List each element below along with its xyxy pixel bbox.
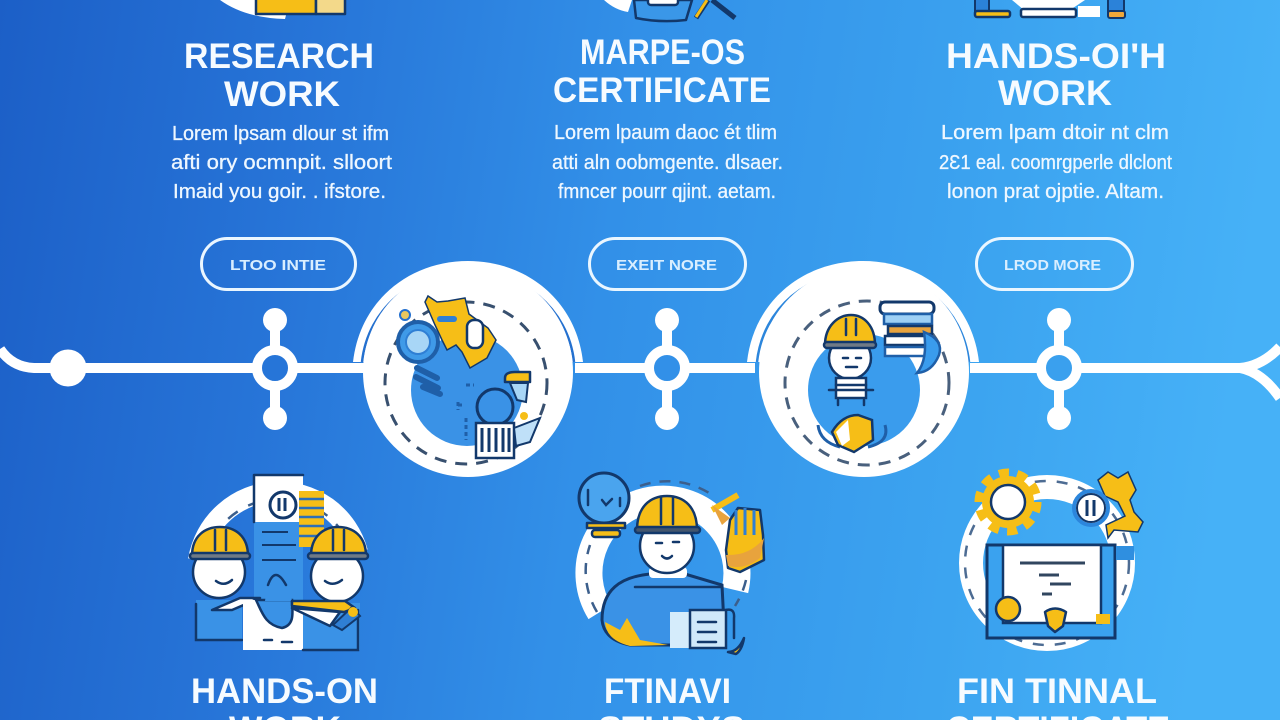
icon: final certificate xyxy=(965,472,1143,645)
heading: research work xyxy=(184,37,374,114)
text block: hands-on description: 2Ɛ1 eal. coomrgperle dlclont xyxy=(939,152,1172,174)
button: certificate xyxy=(590,238,746,290)
coin stack xyxy=(299,491,324,547)
panel: research work xyxy=(171,37,392,290)
icon: cropped hands-on illustration xyxy=(975,0,1125,18)
timeline start dot xyxy=(50,350,86,386)
white panel xyxy=(243,564,303,650)
heading: hands-on work bottom: HANDS-ON xyxy=(191,672,378,711)
medallion: research tools xyxy=(353,261,583,477)
text block: certificate description: atti aln oobmgente. dlsaer. xyxy=(552,152,783,174)
icon: cropped certificate illustration xyxy=(604,0,735,21)
heading: certificate: CERTIFICATE xyxy=(553,71,771,110)
text block: certificate description: fmncer pourr qjint. aetam. xyxy=(558,181,776,203)
icon: cropped research illustration xyxy=(220,0,345,19)
team member right xyxy=(292,527,368,650)
heading: certificate xyxy=(553,33,771,110)
panel: certificate xyxy=(552,33,783,290)
icon: worker with hard hat xyxy=(824,315,876,405)
worker badge xyxy=(1074,472,1143,538)
heading: hands-on work top: WORK xyxy=(998,74,1112,113)
text block: certificate description: Lorem lpaum daoc ét tlim xyxy=(554,122,777,144)
certificate sheet xyxy=(987,545,1134,638)
icon: bottom gear cluster xyxy=(818,415,886,452)
text block: research description xyxy=(171,123,392,203)
heading: final study: FTINAVI xyxy=(604,672,731,711)
heading: research work: WORK xyxy=(224,75,340,114)
text block: research description: Lorem lpsam dlour st ifm xyxy=(172,123,389,145)
timeline xyxy=(0,308,1280,430)
button: research: LTOO INTIE xyxy=(230,257,326,274)
heading: hands-on work top xyxy=(946,37,1166,113)
timeline node one xyxy=(257,308,293,430)
button: research xyxy=(202,238,356,290)
document xyxy=(254,474,303,650)
icon: stack of books xyxy=(880,302,940,373)
medallion: worker and books xyxy=(747,261,979,477)
heading: hands-on work top: HANDS-OI'H xyxy=(946,37,1166,76)
glove and pencil xyxy=(712,495,764,572)
timeline node two xyxy=(649,308,685,430)
button: hands-on xyxy=(976,238,1132,290)
worker body xyxy=(602,496,724,646)
blueprint xyxy=(670,610,744,654)
button: hands-on: LROD MORE xyxy=(1004,257,1101,274)
panel: hands-on work top xyxy=(939,37,1172,290)
light bulb xyxy=(579,473,629,537)
icon: magnifier and workers xyxy=(398,296,540,458)
text block: hands-on description: lonon prat ojptie. Altam. xyxy=(947,181,1164,203)
text block: hands-on description: Lorem lpam dtoir nt clm xyxy=(941,122,1169,144)
text block: research description: afti ory ocmnpit. slloort xyxy=(171,152,392,174)
text block: research description: Imaid you goir. . ifstore. xyxy=(173,181,386,203)
timeline node three xyxy=(1041,308,1077,430)
heading: certificate: MARPE-OS xyxy=(580,33,745,72)
gear xyxy=(979,473,1037,531)
text block: certificate description xyxy=(552,122,783,203)
icon: hands-on team xyxy=(190,474,368,650)
heading: final certificate: FIN TINNAL xyxy=(957,672,1157,711)
button: certificate: EXEIT NORE xyxy=(616,257,717,274)
icon: study worker xyxy=(579,473,764,654)
text block: hands-on description xyxy=(939,122,1172,203)
team member left xyxy=(190,527,260,640)
heading: research work: RESEARCH xyxy=(184,37,374,76)
